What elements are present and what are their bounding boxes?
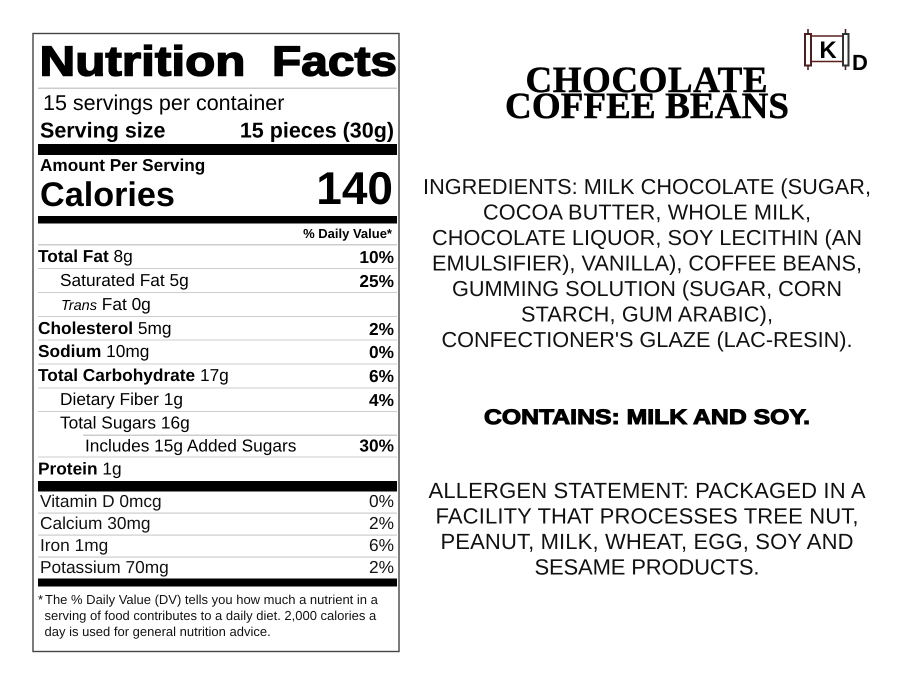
row: dietary fiber: 4% bbox=[369, 390, 394, 410]
ingredients text block: INGREDIENTS: MILK CHOCOLATE (SUGAR, bbox=[423, 174, 871, 199]
row: cholesterol: Cholesterol 5mg bbox=[38, 318, 172, 338]
row: potassium: 2% bbox=[369, 557, 394, 577]
ingredients text block: CONFECTIONER'S GLAZE (LAC-RESIN). bbox=[442, 327, 852, 352]
row: sodium: Sodium 10mg bbox=[38, 341, 149, 361]
row: added sugars: 30% bbox=[359, 436, 394, 456]
ingredients text block: COCOA BUTTER, WHOLE MILK, bbox=[483, 200, 811, 224]
icon: kosher dairy scroll symbol bbox=[805, 29, 868, 75]
row: total carbohydrate: Total Carbohydrate 17g bbox=[38, 365, 229, 385]
row: trans fat: Trans Fat 0g bbox=[61, 294, 151, 314]
heading: Nutrition Facts: Nutrition bbox=[40, 38, 246, 84]
ingredients text block: GUMMING SOLUTION (SUGAR, CORN bbox=[452, 276, 842, 301]
row: dietary fiber: Dietary Fiber 1g bbox=[60, 389, 183, 409]
row: vitamin D: 0% bbox=[369, 491, 394, 511]
row: total fat: 10% bbox=[359, 247, 394, 267]
row: added sugars bbox=[85, 436, 394, 456]
row: iron: 6% bbox=[369, 535, 394, 555]
allergen callout: contains: CONTAINS: MILK AND SOY. bbox=[484, 406, 810, 429]
servings per container: 15 servings per container bbox=[43, 91, 284, 115]
row: potassium: Potassium 70mg bbox=[40, 557, 169, 577]
allergen statement text block bbox=[428, 478, 866, 580]
row: iron bbox=[40, 535, 394, 555]
title: Chocolate Coffee Beans bbox=[505, 60, 789, 127]
vitamins and minerals bbox=[38, 491, 397, 577]
footnote bbox=[38, 592, 379, 639]
footnote: day is used for general nutrition advice. bbox=[44, 624, 271, 639]
ingredients text block: STARCH, GUM ARABIC), bbox=[521, 302, 773, 326]
row: saturated fat: Saturated Fat 5g bbox=[60, 270, 189, 290]
ingredients text block: EMULSIFIER), VANILLA), COFFEE BEANS, bbox=[432, 250, 862, 276]
row: potassium bbox=[40, 557, 394, 577]
ingredients text block: CHOCOLATE LIQUOR, SOY LECITHIN (AN bbox=[432, 225, 862, 250]
row: vitamin D bbox=[40, 491, 394, 511]
row: cholesterol: 2% bbox=[369, 319, 394, 339]
panel: nutrition facts label bbox=[33, 34, 399, 652]
row: cholesterol bbox=[38, 318, 394, 339]
row: total carbohydrate: 6% bbox=[369, 366, 394, 386]
row: added sugars: Includes 15g Added Sugars bbox=[85, 436, 297, 456]
calories row bbox=[40, 162, 393, 214]
icon: kosher dairy scroll symbol: K bbox=[819, 37, 837, 64]
icon: kosher dairy scroll symbol: D bbox=[852, 50, 868, 75]
row: calcium bbox=[40, 513, 394, 533]
row: protein: Protein 1g bbox=[38, 458, 122, 478]
row: vitamin D: Vitamin D 0mcg bbox=[40, 491, 162, 511]
allergen statement text block: PEANUT, MILK, WHEAT, EGG, SOY AND bbox=[440, 529, 854, 554]
nutrient table bbox=[38, 246, 397, 478]
title: Chocolate Coffee Beans: CHOCOLATE bbox=[526, 60, 768, 101]
row: total fat: Total Fat 8g bbox=[38, 246, 133, 266]
row: total carbohydrate bbox=[38, 365, 394, 386]
serving size row bbox=[40, 118, 394, 142]
row: saturated fat: 25% bbox=[359, 271, 394, 291]
calories row: Calories bbox=[40, 176, 175, 214]
row: sodium bbox=[38, 341, 394, 362]
title: Chocolate Coffee Beans: COFFEE BEANS bbox=[505, 86, 789, 127]
row: iron: Iron 1mg bbox=[40, 535, 108, 555]
daily value header: % Daily Value* bbox=[303, 226, 393, 241]
allergen statement text block: ALLERGEN STATEMENT: PACKAGED IN A bbox=[428, 478, 866, 503]
row: dietary fiber bbox=[60, 389, 394, 410]
heading: Nutrition Facts bbox=[40, 38, 397, 84]
row: saturated fat bbox=[60, 270, 394, 291]
heading: Nutrition Facts: Facts bbox=[272, 38, 397, 84]
footnote: * bbox=[38, 592, 43, 607]
serving size row: Serving size bbox=[40, 118, 166, 142]
calories row: 140 bbox=[316, 162, 393, 214]
row: total sugars: Total Sugars 16g bbox=[60, 412, 190, 432]
amount per serving: Amount Per Serving bbox=[40, 155, 205, 175]
row: sodium: 0% bbox=[369, 342, 394, 362]
footnote: The % Daily Value (DV) tells you how much a nutrient in a bbox=[45, 592, 379, 607]
allergen statement text block: SESAME PRODUCTS. bbox=[534, 554, 760, 580]
ingredients text block bbox=[423, 174, 871, 352]
serving size row: 15 pieces (30g) bbox=[240, 118, 394, 142]
allergen statement text block: FACILITY THAT PROCESSES TREE NUT, bbox=[436, 504, 858, 528]
footnote: serving of food contributes to a daily diet. 2,000 calories a bbox=[44, 608, 377, 623]
row: calcium: 2% bbox=[369, 513, 394, 533]
row: calcium: Calcium 30mg bbox=[40, 513, 150, 533]
row: total fat bbox=[38, 246, 394, 267]
